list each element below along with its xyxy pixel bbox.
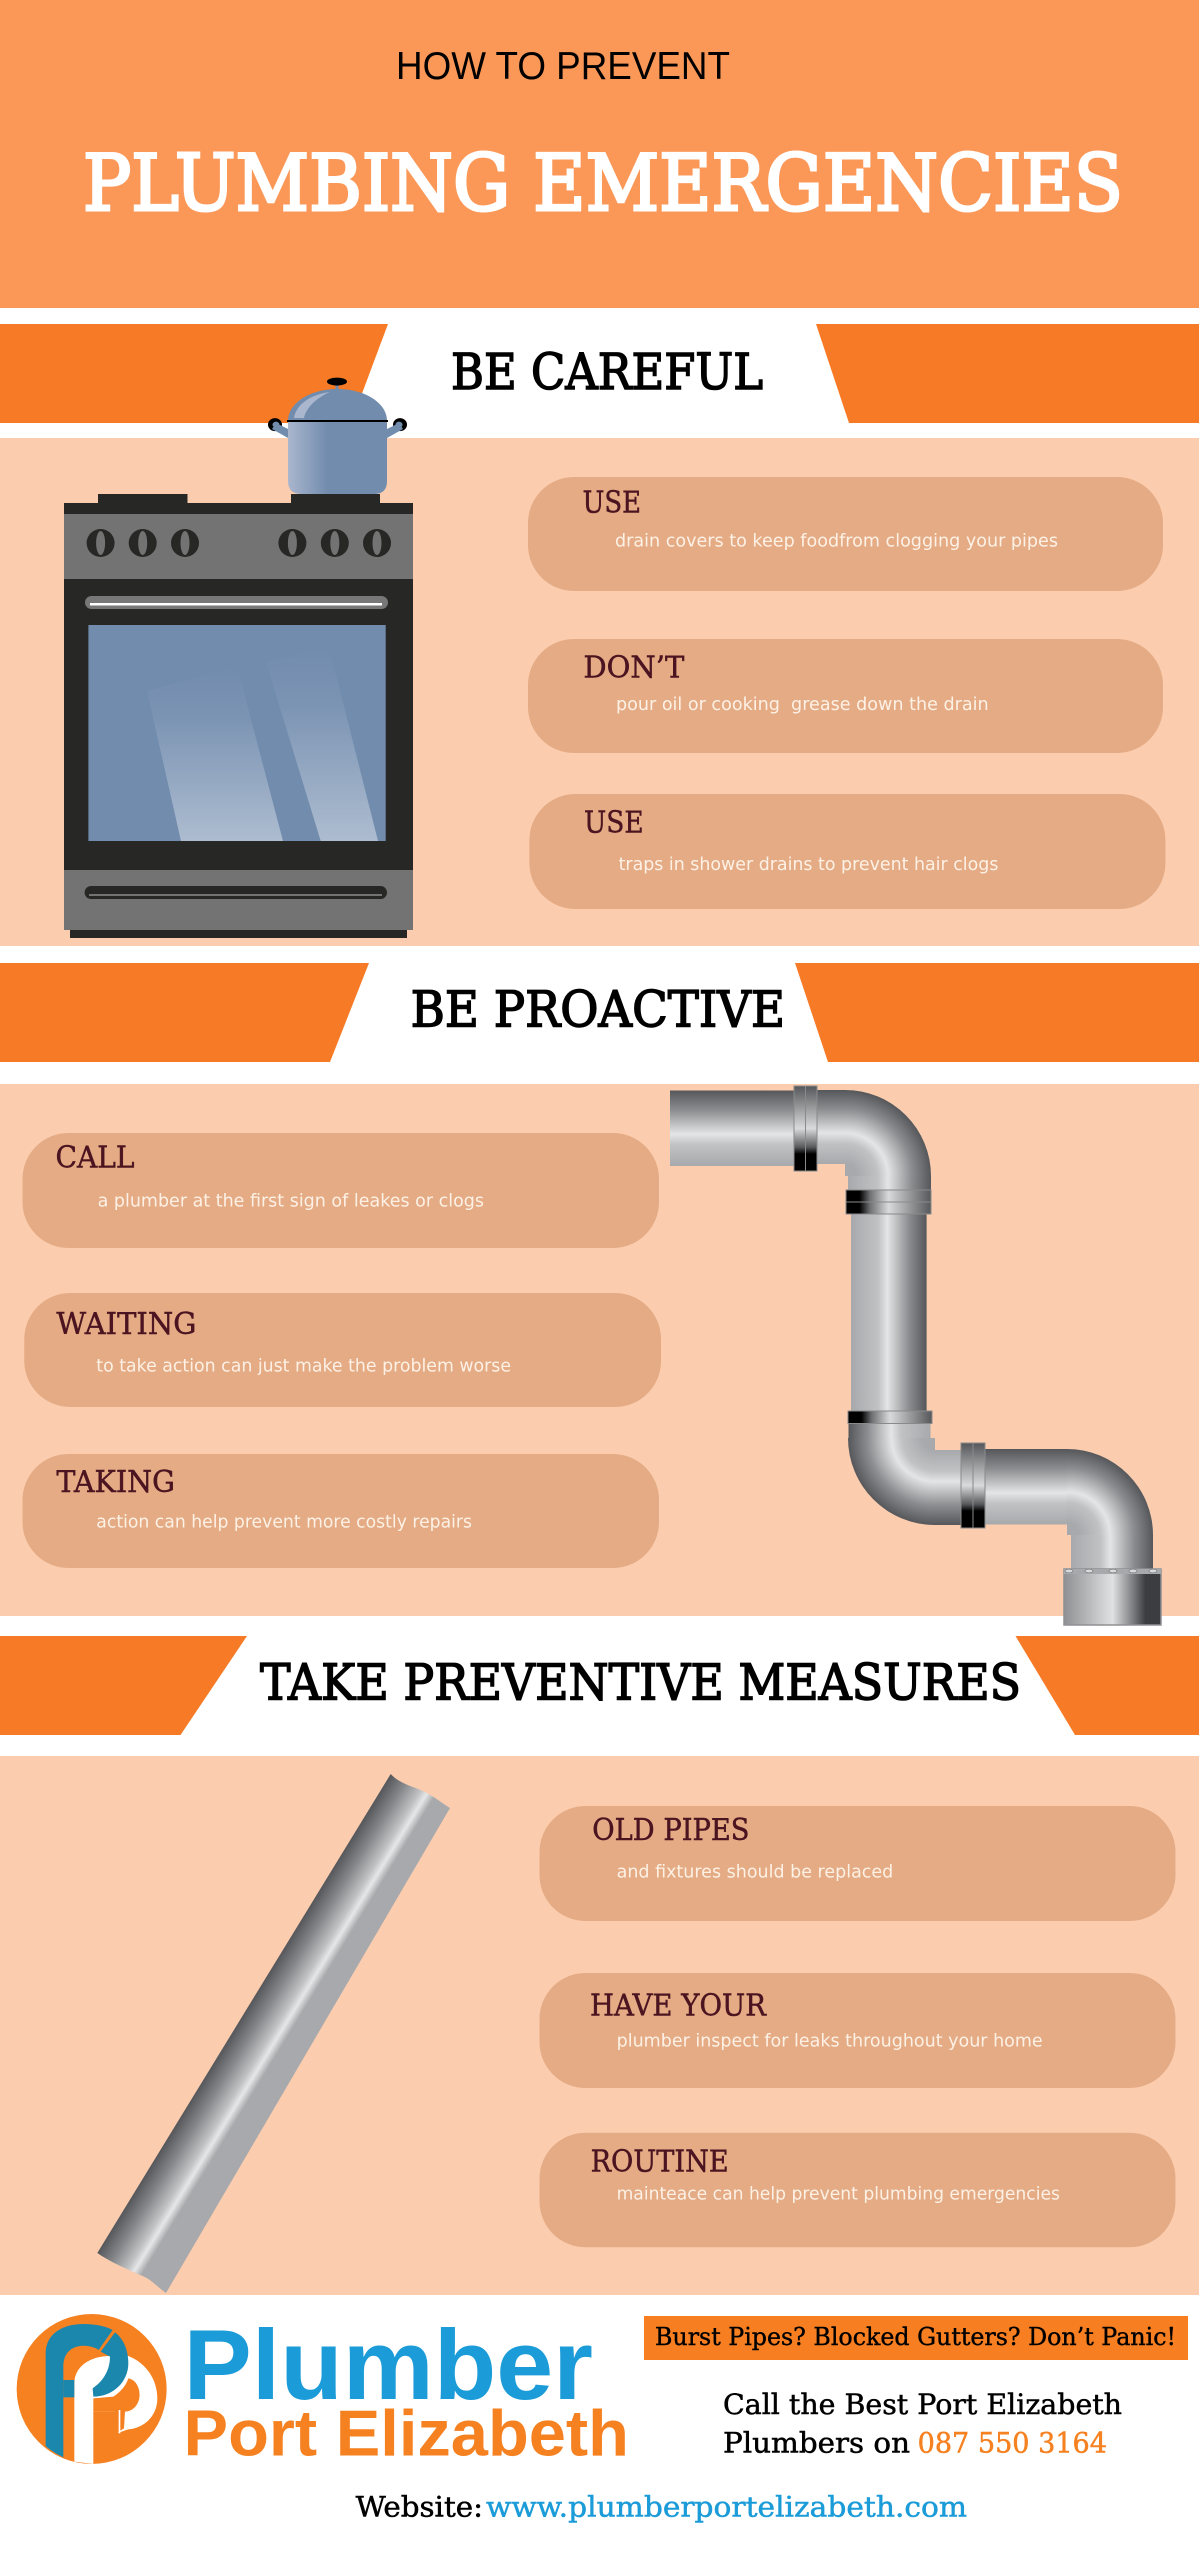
logo wordmark: plumber: Plumber bbox=[184, 2309, 593, 2420]
text: drain covers to keep foodfrom clogging your pipes bbox=[615, 531, 1058, 552]
pill: taking bbox=[22, 1454, 659, 1568]
text: a plumber at the first sign of leakes or clogs bbox=[98, 1191, 484, 1212]
panel: header bbox=[0, 0, 1199, 308]
text: plumber inspect for leaks throughout your home bbox=[617, 2031, 1043, 2052]
collar bbox=[961, 1443, 985, 1528]
heading: BE PROACTIVE bbox=[411, 980, 785, 1038]
callout: burst pipes: Burst Pipes? Blocked Gutters? Don’t Panic! bbox=[655, 2323, 1176, 2351]
heading: USE bbox=[582, 486, 641, 521]
pill: use drain covers bbox=[528, 477, 1163, 591]
heading: HAVE YOUR bbox=[590, 1989, 767, 2024]
panel: be careful bbox=[0, 438, 1199, 946]
pill: use traps bbox=[529, 794, 1165, 909]
call to action bbox=[723, 2388, 1122, 2460]
heading: ROUTINE bbox=[591, 2145, 729, 2180]
section banner: be careful bbox=[0, 324, 1199, 423]
icon: cooking pot bbox=[268, 378, 407, 494]
call to action: 087 550 3164 bbox=[918, 2427, 1107, 2460]
panel: be proactive bbox=[0, 1084, 1199, 1616]
illustration: bent pipe bbox=[670, 1086, 1161, 1625]
collar bbox=[794, 1086, 817, 1171]
section banner: be proactive bbox=[0, 963, 1199, 1062]
collar bbox=[846, 1190, 931, 1214]
text: action can help prevent more costly repairs bbox=[96, 1511, 472, 1532]
call to action: Plumbers on bbox=[723, 2427, 910, 2460]
callout: burst pipes bbox=[644, 2316, 1188, 2360]
logo bbox=[17, 2309, 629, 2470]
call to action: Call the Best Port Elizabeth bbox=[723, 2388, 1122, 2421]
website line: Website: bbox=[356, 2491, 483, 2524]
icon: stove bbox=[64, 494, 413, 938]
text: traps in shower drains to prevent hair clogs bbox=[619, 854, 998, 875]
main title: PLUMBING EMERGENCIES bbox=[83, 139, 1123, 229]
heading: OLD PIPES bbox=[592, 1813, 750, 1848]
illustration: straight diagonal pipe bbox=[97, 1774, 450, 2293]
pill: don't pour grease bbox=[528, 639, 1163, 753]
heading: USE bbox=[584, 805, 644, 840]
pill: call bbox=[22, 1133, 659, 1248]
text: pour oil or cooking grease down the drain bbox=[616, 694, 989, 715]
text: mainteace can help prevent plumbing emergencies bbox=[617, 2183, 1060, 2204]
pill: have your bbox=[540, 1973, 1176, 2088]
heading: WAITING bbox=[56, 1307, 196, 1342]
panel: take preventive measures bbox=[0, 1756, 1199, 2295]
logo mark bbox=[17, 2314, 167, 2464]
text: and fixtures should be replaced bbox=[617, 1862, 893, 1883]
pill: waiting bbox=[24, 1293, 661, 1407]
title kicker: HOW TO PREVENT bbox=[396, 45, 730, 88]
section banner: take preventive measures bbox=[0, 1636, 1199, 1735]
pill: old pipes bbox=[540, 1806, 1176, 1921]
logo wordmark: port elizabeth: Port Elizabeth bbox=[184, 2397, 629, 2470]
pill: routine bbox=[540, 2133, 1176, 2247]
heading: DON’T bbox=[583, 650, 684, 685]
heading: TAKE PREVENTIVE MEASURES bbox=[260, 1653, 1021, 1711]
heading: CALL bbox=[56, 1140, 135, 1175]
heading: TAKING bbox=[56, 1465, 175, 1500]
pipe base flange bbox=[1064, 1569, 1161, 1625]
heading: BE CAREFUL bbox=[451, 343, 763, 401]
website line: www.plumberportelizabeth.com bbox=[486, 2491, 967, 2524]
collar bbox=[848, 1411, 932, 1424]
text: to take action can just make the problem worse bbox=[96, 1356, 511, 1377]
